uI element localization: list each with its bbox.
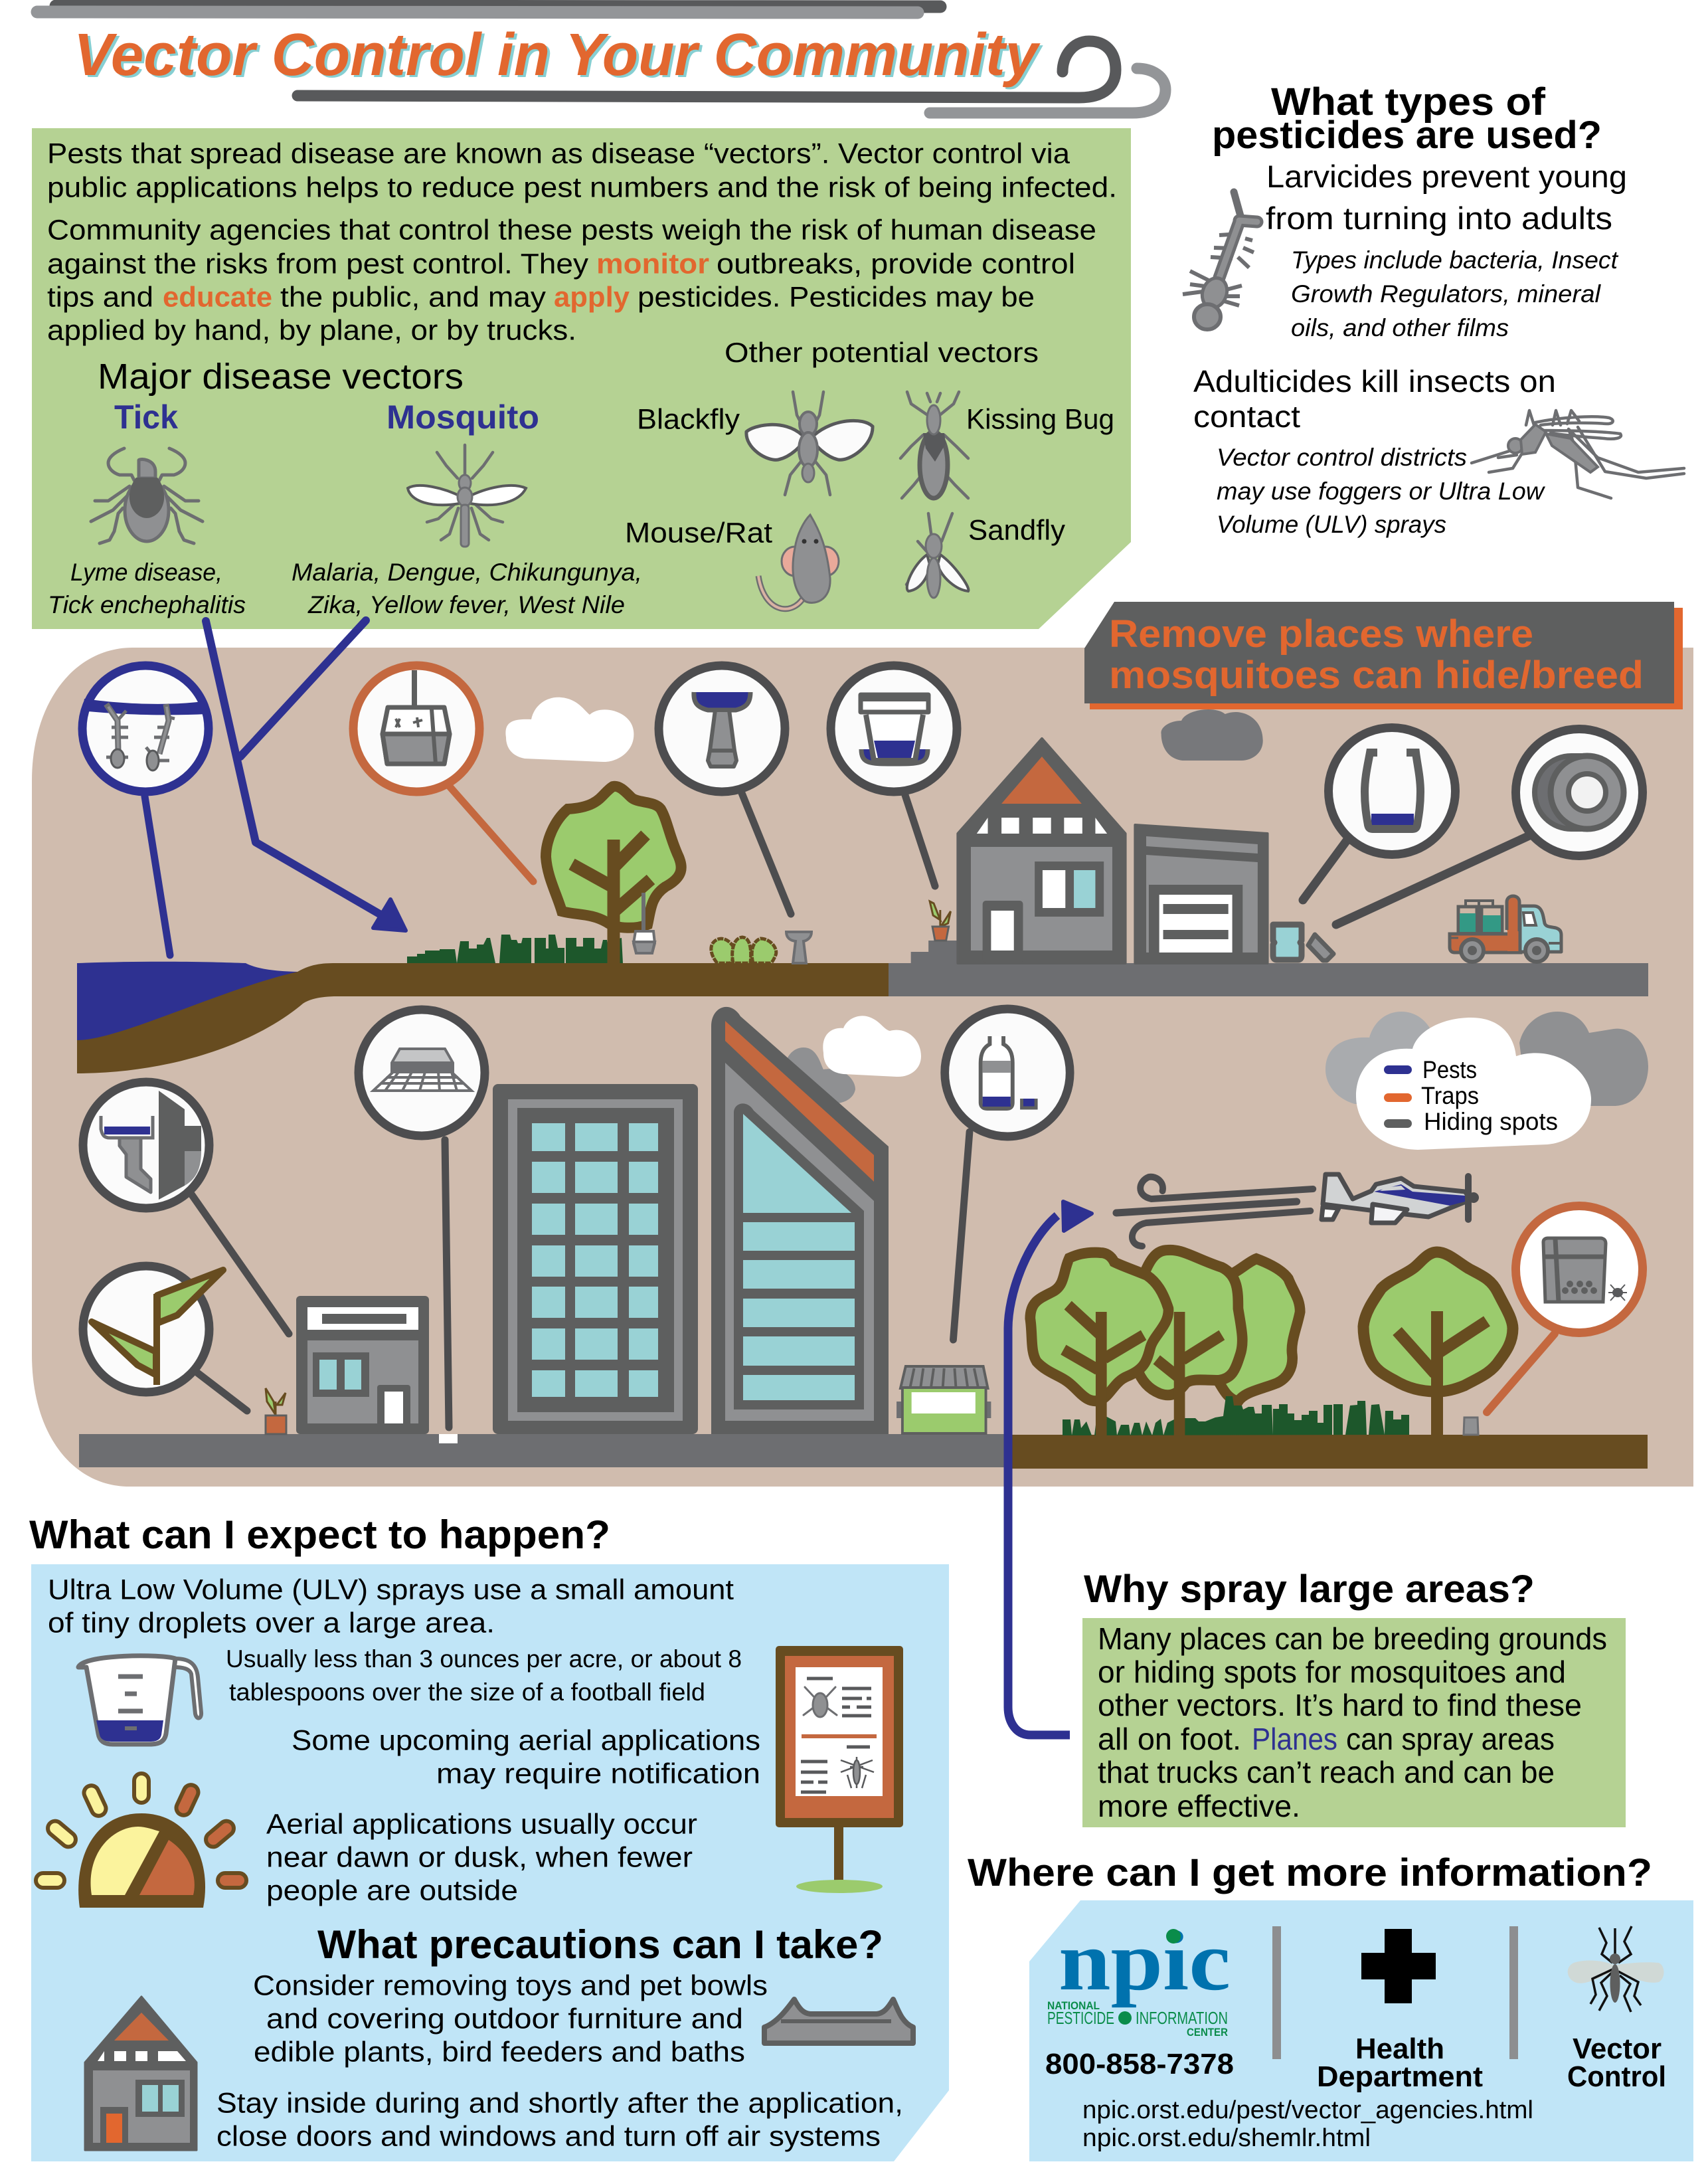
icon: kissing bug <box>900 392 968 498</box>
logo: npic: NATIONAL <box>1047 1999 1100 2012</box>
intro text <box>47 138 1117 347</box>
phone number: 800-858-7378 <box>1045 2048 1234 2080</box>
precautions text: and covering outdoor furniture and <box>266 2003 743 2035</box>
intro text: apply <box>554 282 630 314</box>
larvicide text: Types include bacteria, Insect <box>1291 246 1619 274</box>
building: house <box>958 739 1126 963</box>
top swoosh bars <box>37 6 940 13</box>
panel: what to expect blue <box>31 1564 949 2161</box>
label: vector control: Vector <box>1573 2033 1662 2065</box>
legend: Pests <box>1422 1056 1477 1083</box>
logo: npic: CENTER <box>1187 2026 1228 2039</box>
legend <box>1384 1056 1558 1135</box>
title: Vector Control in Your Community <box>74 22 1041 88</box>
icon: measuring cup <box>78 1656 201 1744</box>
label: mosquito: Mosquito <box>386 399 539 436</box>
ground: lower strip <box>79 1434 1648 1469</box>
panel: why spray green: can spray areas <box>1346 1722 1555 1756</box>
ulv text: of tiny droplets over a large area. <box>48 1607 495 1639</box>
heading: why spray large areas: Why spray large areas? <box>1084 1568 1535 1611</box>
heading: pesticides: What types of <box>1271 80 1546 124</box>
intro text: Community agencies that control these pests weigh the risk of human disease <box>47 214 1096 246</box>
mosquito diseases: Malaria, Dengue, Chikungunya, <box>292 559 642 586</box>
intro text: tips and <box>47 282 153 314</box>
panel: why spray green: or hiding spots for mosquitoes and <box>1098 1655 1566 1689</box>
ground: upper strip with water <box>77 962 1648 1073</box>
aerial timing text: near dawn or dusk, when fewer <box>266 1841 693 1873</box>
larvicide text: Larvicides prevent young <box>1266 159 1627 194</box>
grass: upper <box>407 935 623 963</box>
intro text: public applications helps to reduce pest numbers and the risk of being infected. <box>47 171 1117 203</box>
intro text: pesticides. Pesticides may be <box>638 282 1035 314</box>
icon: larva <box>1183 192 1257 329</box>
title wind swooshes <box>298 41 1165 113</box>
icon: sign <box>776 1646 903 1893</box>
ulv text: Ultra Low Volume (ULV) sprays use a small amount <box>48 1574 734 1606</box>
label: vector control <box>1567 2033 1666 2093</box>
grass: lower <box>1063 1396 1409 1435</box>
label: kissing bug: Kissing Bug <box>966 404 1114 436</box>
adulticide text: Volume (ULV) sprays <box>1217 511 1446 538</box>
cloud: white lower <box>823 1016 921 1077</box>
mini bird bath <box>786 932 811 963</box>
larvicide text: oils, and other films <box>1291 314 1509 341</box>
intro text: Pests that spread disease are known as disease “vectors”. Vector control via <box>47 138 1070 170</box>
intro text: monitor <box>596 248 709 280</box>
icon: tick <box>91 448 203 543</box>
hiding spot: jug <box>1303 728 1456 900</box>
heading: pesticides <box>1212 80 1602 157</box>
ulv text: tablespoons over the size of a football field <box>229 1679 705 1706</box>
intro text: applied by hand, by plane, or by trucks. <box>47 315 576 347</box>
cloud: behind angled building <box>784 1047 855 1104</box>
panel: why spray green: other vectors. It’s hard to find these <box>1098 1688 1582 1722</box>
building: tall tower <box>493 1084 698 1434</box>
logo: npic <box>1047 1914 1231 2039</box>
website links: npic.orst.edu/shemlr.html <box>1082 2124 1371 2152</box>
label: health department <box>1317 2033 1483 2093</box>
icon: dawn dusk gauge <box>36 1773 246 1908</box>
building: angled tower <box>711 1007 889 1434</box>
icon: sandfly <box>906 513 968 598</box>
precautions text <box>253 1970 768 2068</box>
icon: pet bowl <box>764 1999 913 2043</box>
plane <box>1322 1174 1479 1223</box>
ulv text: Usually less than 3 ounces per acre, or about 8 <box>226 1645 742 1673</box>
legend clouds <box>1325 1012 1648 1150</box>
truck <box>1450 896 1561 962</box>
mosquito diseases: Zika, Yellow fever, West Nile <box>307 591 625 618</box>
notification text <box>292 1724 760 1789</box>
trap: hanging from tree <box>634 893 655 953</box>
logo: npic: npic <box>1059 1914 1231 2008</box>
hiding spot: tire <box>1336 729 1643 925</box>
precautions text: Consider removing toys and pet bowls <box>253 1970 768 2002</box>
panel: what types of pesticides <box>1183 80 1684 538</box>
logo: npic: INFORMATION <box>1136 2008 1228 2028</box>
legend: Traps <box>1421 1082 1479 1109</box>
callout shadow <box>1090 608 1683 709</box>
bushes <box>711 937 776 963</box>
heading: precautions: What precautions can I take? <box>317 1922 883 1967</box>
tree: A front <box>1030 1253 1169 1435</box>
label: health department: Department <box>1317 2060 1483 2093</box>
hiding spot: barrel and can <box>1273 925 1333 960</box>
precautions text: edible plants, bird feeders and baths <box>254 2037 745 2068</box>
mosquito diseases <box>292 559 642 618</box>
panel: intro green <box>32 128 1131 629</box>
panel: why spray green: Planes <box>1252 1722 1337 1756</box>
larvicide text: Growth Regulators, mineral <box>1291 280 1602 308</box>
panel: why spray green: more effective. <box>1098 1789 1300 1823</box>
dumpster <box>897 1366 991 1433</box>
heading: other potential vectors: Other potential vectors <box>725 337 1039 368</box>
callout: remove places: Remove places where <box>1109 612 1533 656</box>
hiding spot: plant bucket <box>831 666 957 886</box>
panel: more information blue <box>1029 1900 1693 2161</box>
intro text: outbreaks, provide control <box>717 248 1075 280</box>
stay inside text <box>216 2087 903 2152</box>
panel: why spray green: that trucks can’t reach and can be <box>1098 1755 1555 1789</box>
intro text: the public, and may <box>280 282 547 314</box>
larvicide text: from turning into adults <box>1266 201 1612 236</box>
title: Vector Control in Your Community <box>76 24 1043 90</box>
stay inside text: Stay inside during and shortly after the application, <box>216 2087 903 2119</box>
adulticide text: may use foggers or Ultra Low <box>1217 478 1545 505</box>
tick diseases <box>48 559 246 618</box>
label: tick: Tick <box>114 399 178 436</box>
tick diseases: Lyme disease, <box>70 559 222 586</box>
hiding spot: bird bath <box>659 666 791 914</box>
hiding spot: larvae in water <box>82 666 209 955</box>
tree: C behind <box>1214 1259 1300 1435</box>
stay inside text: close doors and windows and turn off air systems <box>216 2120 881 2152</box>
aerial timing text: people are outside <box>266 1874 518 1906</box>
cloud: white upper <box>505 697 634 762</box>
tree: B middle <box>1137 1250 1242 1435</box>
steps <box>911 941 958 963</box>
callout: remove places: mosquitoes can hide/breed <box>1109 654 1644 697</box>
icon: resting mosquito <box>1472 410 1684 498</box>
intro text: against the risks from pest control. They <box>47 248 589 280</box>
legend: Hiding spots <box>1424 1108 1558 1135</box>
panel: why spray green: Many places can be breeding grounds <box>1098 1621 1607 1656</box>
icon: mouse <box>758 515 839 609</box>
connector: long blue arrow <box>1008 1202 1092 1735</box>
hiding spot: storm drain <box>359 1010 485 1427</box>
adulticide text <box>1193 364 1556 538</box>
panel: why spray green: all on foot. <box>1098 1722 1241 1756</box>
heading: pesticides: pesticides are used? <box>1212 114 1602 157</box>
hiding spot: plant leaves <box>83 1266 247 1411</box>
tree: upper <box>546 786 681 963</box>
trap: egg box <box>1487 1206 1643 1412</box>
building: small shop <box>296 1296 429 1434</box>
panel: tan community scene <box>32 608 1693 1487</box>
larvicide text <box>1266 159 1627 341</box>
tick diseases: Tick enchephalitis <box>48 591 246 618</box>
hiding spot: bottle <box>945 1009 1070 1340</box>
ulv text <box>48 1574 742 1706</box>
logo: npic: PESTICIDE <box>1047 2008 1114 2028</box>
icon: small house <box>85 1997 197 2150</box>
wind lines <box>1116 1177 1313 1246</box>
plant pot lower <box>266 1388 286 1434</box>
connector: tick arrow <box>206 620 406 931</box>
heading: where can i get more information: Where can I get more information? <box>968 1851 1652 1894</box>
aerial timing text: Aerial applications usually occur <box>266 1808 697 1840</box>
notification text: may require notification <box>436 1758 760 1789</box>
plant pot upper <box>930 901 951 941</box>
icon: mosquito <box>408 445 526 547</box>
website links <box>1082 2096 1533 2152</box>
intro text: educate <box>163 282 272 314</box>
trap: hanging <box>353 666 533 881</box>
adulticide text: Vector control districts <box>1217 444 1467 471</box>
heading: what can i expect: What can I expect to happen? <box>29 1512 610 1557</box>
building: garage <box>1135 825 1268 963</box>
icon: blackfly <box>746 392 873 495</box>
label: health department: Health <box>1355 2033 1444 2065</box>
adulticide text: contact <box>1193 399 1300 434</box>
hiding spot: gutter <box>83 1082 289 1334</box>
icon: vector control mosquito <box>1568 1926 1664 2012</box>
panel: why spray green <box>1082 1618 1626 1827</box>
website links: npic.orst.edu/pest/vector_agencies.html <box>1082 2096 1533 2124</box>
heading: major disease vectors: Major disease vectors <box>98 357 464 397</box>
label: mouse/rat: Mouse/Rat <box>625 517 772 549</box>
label: blackfly: Blackfly <box>637 404 740 436</box>
label: vector control: Control <box>1567 2060 1666 2093</box>
tree: D right <box>1363 1252 1513 1435</box>
cloud: gray upper <box>1161 709 1263 761</box>
notification text: Some upcoming aerial applications <box>292 1724 760 1756</box>
trap: small on ground <box>1464 1417 1478 1435</box>
callout: remove places <box>1084 602 1674 703</box>
aerial timing text <box>266 1808 697 1906</box>
adulticide text: Adulticides kill insects on <box>1193 364 1556 399</box>
label: sandfly: Sandfly <box>968 514 1065 546</box>
icon: health cross <box>1361 1929 1436 2003</box>
